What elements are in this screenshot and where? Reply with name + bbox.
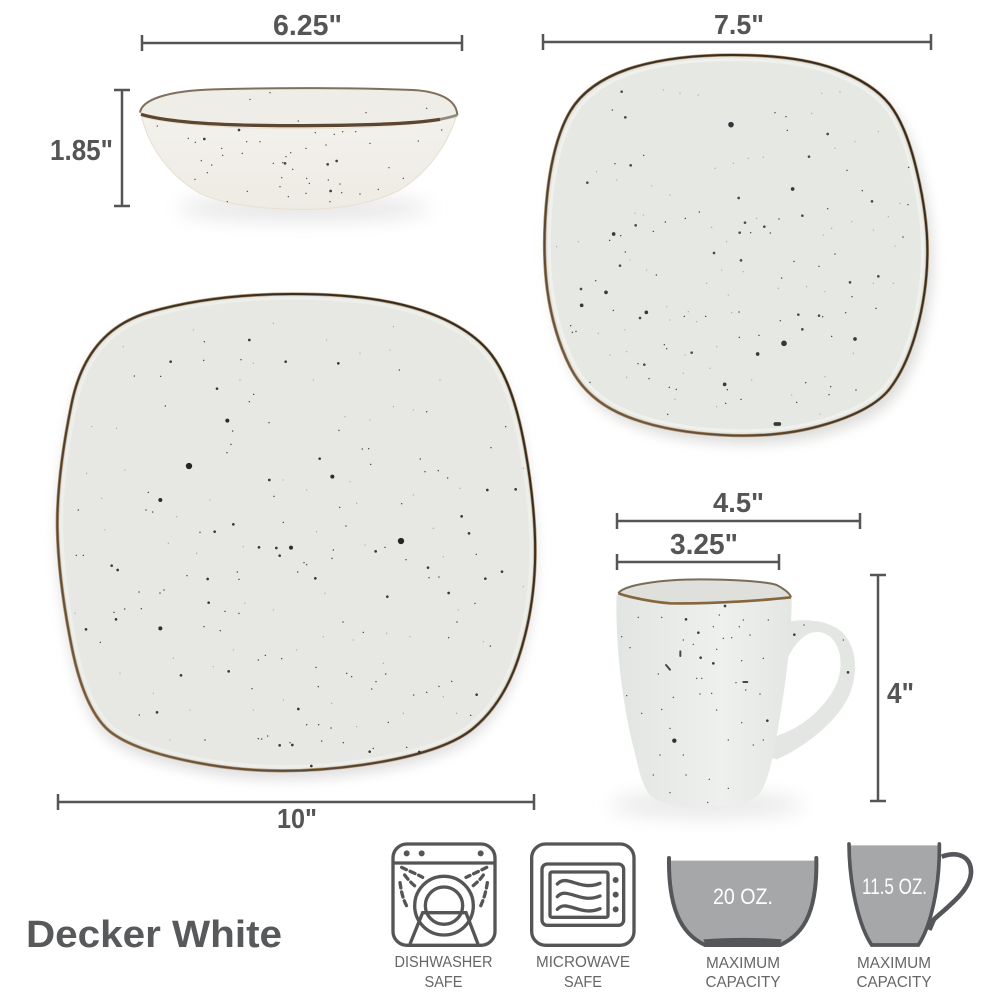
bowl: speckled bowl with brown rim	[140, 88, 457, 220]
label: 4.5 inches: 4.5"	[713, 487, 764, 518]
label: maximum capacity mug second line: CAPACITY	[856, 974, 932, 991]
speckles: medium plate	[557, 90, 909, 424]
title: product name: Decker White	[26, 914, 282, 956]
label: 7.5 inches: 7.5"	[714, 9, 764, 40]
label: 10 inches: 10"	[277, 803, 317, 834]
speckles: large plate	[75, 323, 523, 766]
icon: bowl capacity	[669, 858, 816, 946]
icon: dishwasher safe	[393, 844, 495, 945]
label: 11.5 oz: 11.5 OZ.	[862, 874, 927, 899]
label: maximum capacity bowl second line: CAPACITY	[706, 974, 780, 991]
mug: speckled mug with handle	[610, 579, 855, 817]
icon: microwave safe	[532, 844, 634, 945]
speckles: bowl	[157, 93, 442, 202]
dimension: dinner plate width 10 inches	[58, 794, 534, 810]
label: 4 inches: 4"	[887, 678, 914, 710]
icon: mug capacity	[849, 844, 971, 945]
label: dishwasher safe: DISHWASHER	[394, 954, 492, 971]
label: 1.85 inches: 1.85"	[50, 135, 113, 167]
dimension: mug width 4.5 inches	[617, 513, 860, 529]
dimension: bowl width 6.25 inches	[142, 35, 462, 51]
label: dishwasher safe second line: SAFE	[424, 974, 462, 991]
dimension: mug height 4 inches	[870, 575, 886, 801]
label: 3.25 inches: 3.25"	[670, 529, 738, 561]
label: microwave safe: MICROWAVE	[536, 954, 630, 971]
speckles: mug	[622, 606, 848, 802]
label: microwave safe second line: SAFE	[564, 974, 602, 991]
label: 20 oz: 20 OZ.	[713, 884, 773, 909]
mug handle	[767, 620, 855, 759]
plate: medium 7.5 inch salad plate	[544, 55, 932, 444]
dimension: bowl height 1.85 inches	[114, 90, 130, 206]
dimension: mug rim width 3.25 inches	[617, 554, 779, 570]
label: maximum capacity mug: MAXIMUM	[857, 955, 931, 972]
label: 6.25 inches: 6.25"	[273, 10, 342, 42]
label: maximum capacity bowl: MAXIMUM	[706, 955, 780, 972]
dimension: plate width 7.5 inches	[543, 34, 931, 50]
plate: large 10 inch dinner plate	[57, 294, 535, 779]
